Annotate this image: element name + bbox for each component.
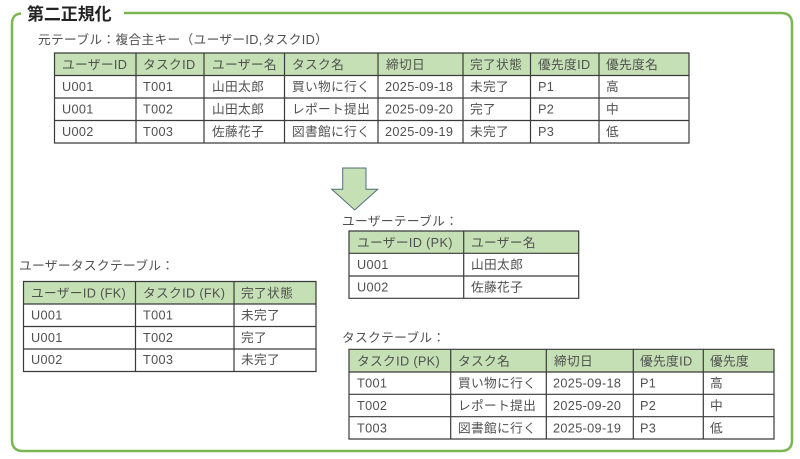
header row: ユーザー名 [212,57,277,72]
row 2: 中 [606,102,619,116]
row 2: U001 [31,331,63,345]
table: task [349,349,774,439]
row 1: 2025-09-18 [553,376,621,390]
header row [54,53,689,76]
row 3: 低 [606,125,619,139]
row 2: 佐藤花子 [471,280,523,294]
row 3: T003 [357,422,387,436]
row 2: 山田太郎 [212,102,264,116]
header row [349,349,774,372]
header row: タスク名 [458,354,510,368]
header row: タスク名 [292,57,344,72]
row 1: U001 [62,80,94,94]
table: user task [24,282,316,372]
row 1: 買い物に行く [292,80,370,94]
row 3: P3 [640,422,656,436]
label: user table: ユーザーテーブル： [342,214,458,228]
header row [349,231,579,253]
row 2: 2025-09-20 [553,399,621,413]
row 1: T001 [143,80,173,94]
header row: 完了状態 [241,286,293,300]
header row: ユーザーID (FK) [31,286,126,300]
row 2: P2 [538,102,554,116]
row 3: 佐藤花子 [212,124,264,139]
row 3: 2025-09-19 [553,422,621,436]
row 1: U001 [357,258,389,272]
row 1: 未完了 [241,308,280,322]
row 1: 山田太郎 [471,258,523,272]
row 3: T003 [143,125,173,139]
title: 第二正規化 [27,4,112,24]
table: user [349,231,579,298]
row 2 [357,398,723,413]
row 3 [357,422,723,436]
row 1: 買い物に行く [458,376,536,390]
row 3: 2025-09-19 [385,125,453,139]
header row: 優先度 [710,354,749,368]
row 3: U002 [31,353,63,367]
header row [24,282,316,304]
row 2 [31,331,267,345]
header row: 優先度ID [640,354,692,368]
row 2: 完了 [241,331,267,345]
arrow: down [332,168,378,210]
row 3: P3 [538,125,554,139]
row 2 [357,280,523,294]
header row: ユーザーID (PK) [357,236,453,250]
label: task table: タスクテーブル： [342,330,445,345]
row 3: 未完了 [470,125,509,139]
header row: 完了状態 [470,58,522,72]
header row: 締切日 [386,58,425,72]
row 2: レポート提出 [292,102,370,116]
row 1: 2025-09-18 [385,80,453,94]
row 1: T001 [143,308,173,322]
row 2: T002 [143,102,173,116]
row 3: 低 [710,422,723,436]
label: user task table: ユーザータスクテーブル： [19,258,174,273]
row 2: U002 [357,280,389,294]
row 1 [31,308,280,322]
row 1: P1 [538,80,554,94]
header row: ユーザー名 [471,235,536,250]
header row: タスクID (FK) [143,286,225,300]
label: source table: 元テーブル：複合主キー（ユーザーID,タスクID） [38,32,328,47]
row 1: 高 [606,79,619,94]
row 2 [62,102,619,116]
row 2: レポート提出 [458,398,536,413]
row 1 [62,79,619,94]
row 2: T002 [143,331,173,345]
row 3: T003 [143,353,173,367]
row 1: 山田太郎 [212,80,264,94]
row 3 [31,353,280,367]
header row: 締切日 [554,354,593,368]
header row: 優先度ID [538,57,590,72]
row 3: U002 [62,125,94,139]
row 2: T002 [357,399,387,413]
row 2: 中 [710,399,723,413]
header row: タスクID [143,58,195,72]
row 2: 完了 [470,102,496,116]
row 3 [62,124,619,139]
row 2: U001 [62,102,94,116]
row 1: U001 [31,308,63,322]
row 2: P2 [640,399,656,413]
row 1 [357,258,523,272]
header row: タスクID (PK) [357,354,440,368]
table: source [54,53,689,143]
row 2: 2025-09-20 [385,102,453,116]
row 3: 図書館に行く [292,125,370,139]
row 1: 未完了 [470,80,509,94]
row 1: P1 [640,376,656,390]
row 1 [357,376,723,390]
row 1: 高 [710,376,723,390]
row 1: T001 [357,376,387,390]
header row: ユーザーID [62,58,127,72]
row 3: 未完了 [241,353,280,367]
header row: 優先度名 [606,57,658,72]
row 3: 図書館に行く [458,422,536,436]
